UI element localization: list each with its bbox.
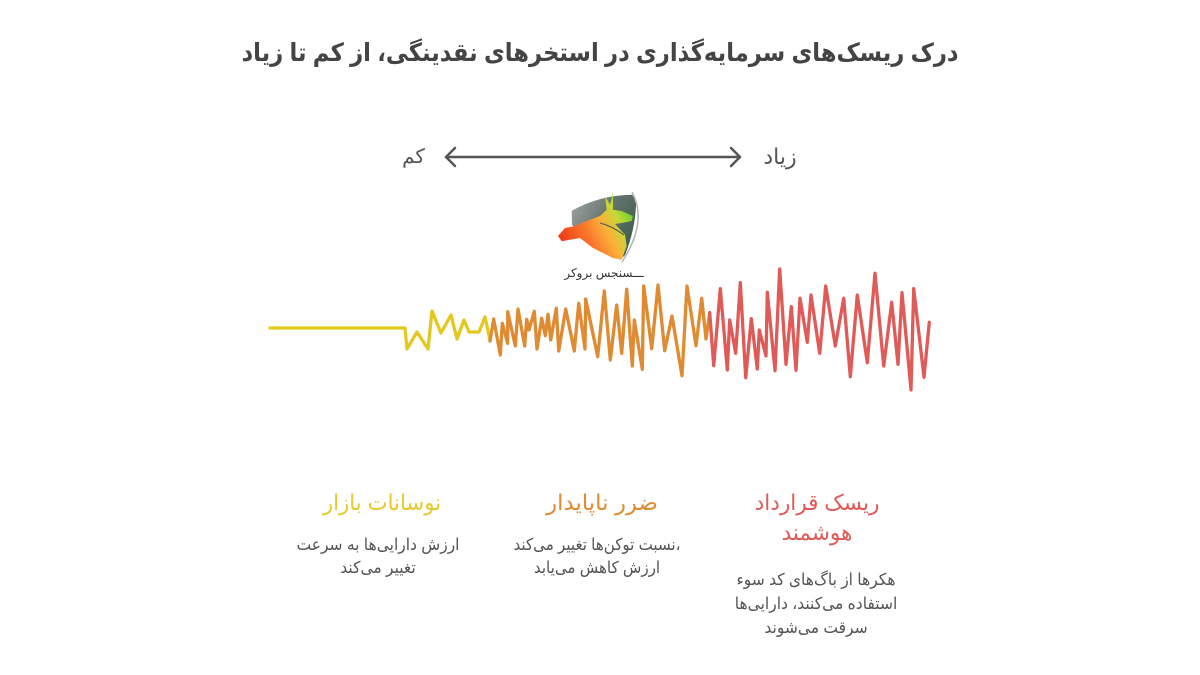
orange segment: impermanent loss: [490, 285, 710, 376]
label: low: کم: [402, 146, 425, 168]
red segment: smart contract risk: [710, 269, 929, 390]
text: impermanent loss: نسبت توکن‌ها تغییر می‌کند،: [513, 536, 680, 554]
text: smart contract risk: سرقت می‌شوند: [764, 619, 868, 637]
title: درک ریسک‌های سرمایه‌گذاری در استخرهای نقدینگی، از کم تا زیاد: [241, 39, 959, 67]
yellow segment: market volatility: [270, 311, 490, 349]
text: market volatility: [297, 536, 459, 577]
text: market volatility: ارزش دارایی‌ها به سرعت: [297, 536, 459, 554]
heading: market volatility: نوسانات بازار: [322, 490, 441, 515]
text: smart contract risk: [735, 570, 897, 637]
logo wordmark: ـــسنجس بروکر: [564, 266, 644, 280]
text: smart contract risk: استفاده می‌کنند، دارایی‌ها: [735, 595, 897, 613]
text: impermanent loss: [513, 536, 680, 577]
heading: smart contract risk: ریسک قرارداد: [755, 490, 879, 515]
heading: smart contract risk: هوشمند: [782, 520, 852, 545]
text: smart contract risk: هکرها از باگ‌های کد سوء: [736, 571, 896, 589]
text: market volatility: تغییر می‌کند: [340, 559, 416, 577]
text: impermanent loss: ارزش کاهش می‌یابد: [533, 559, 660, 577]
label: high: زیاد: [763, 144, 797, 169]
heading: impermanent loss: ضرر ناپایدار: [546, 490, 657, 515]
heading: smart contract risk: [755, 490, 879, 546]
